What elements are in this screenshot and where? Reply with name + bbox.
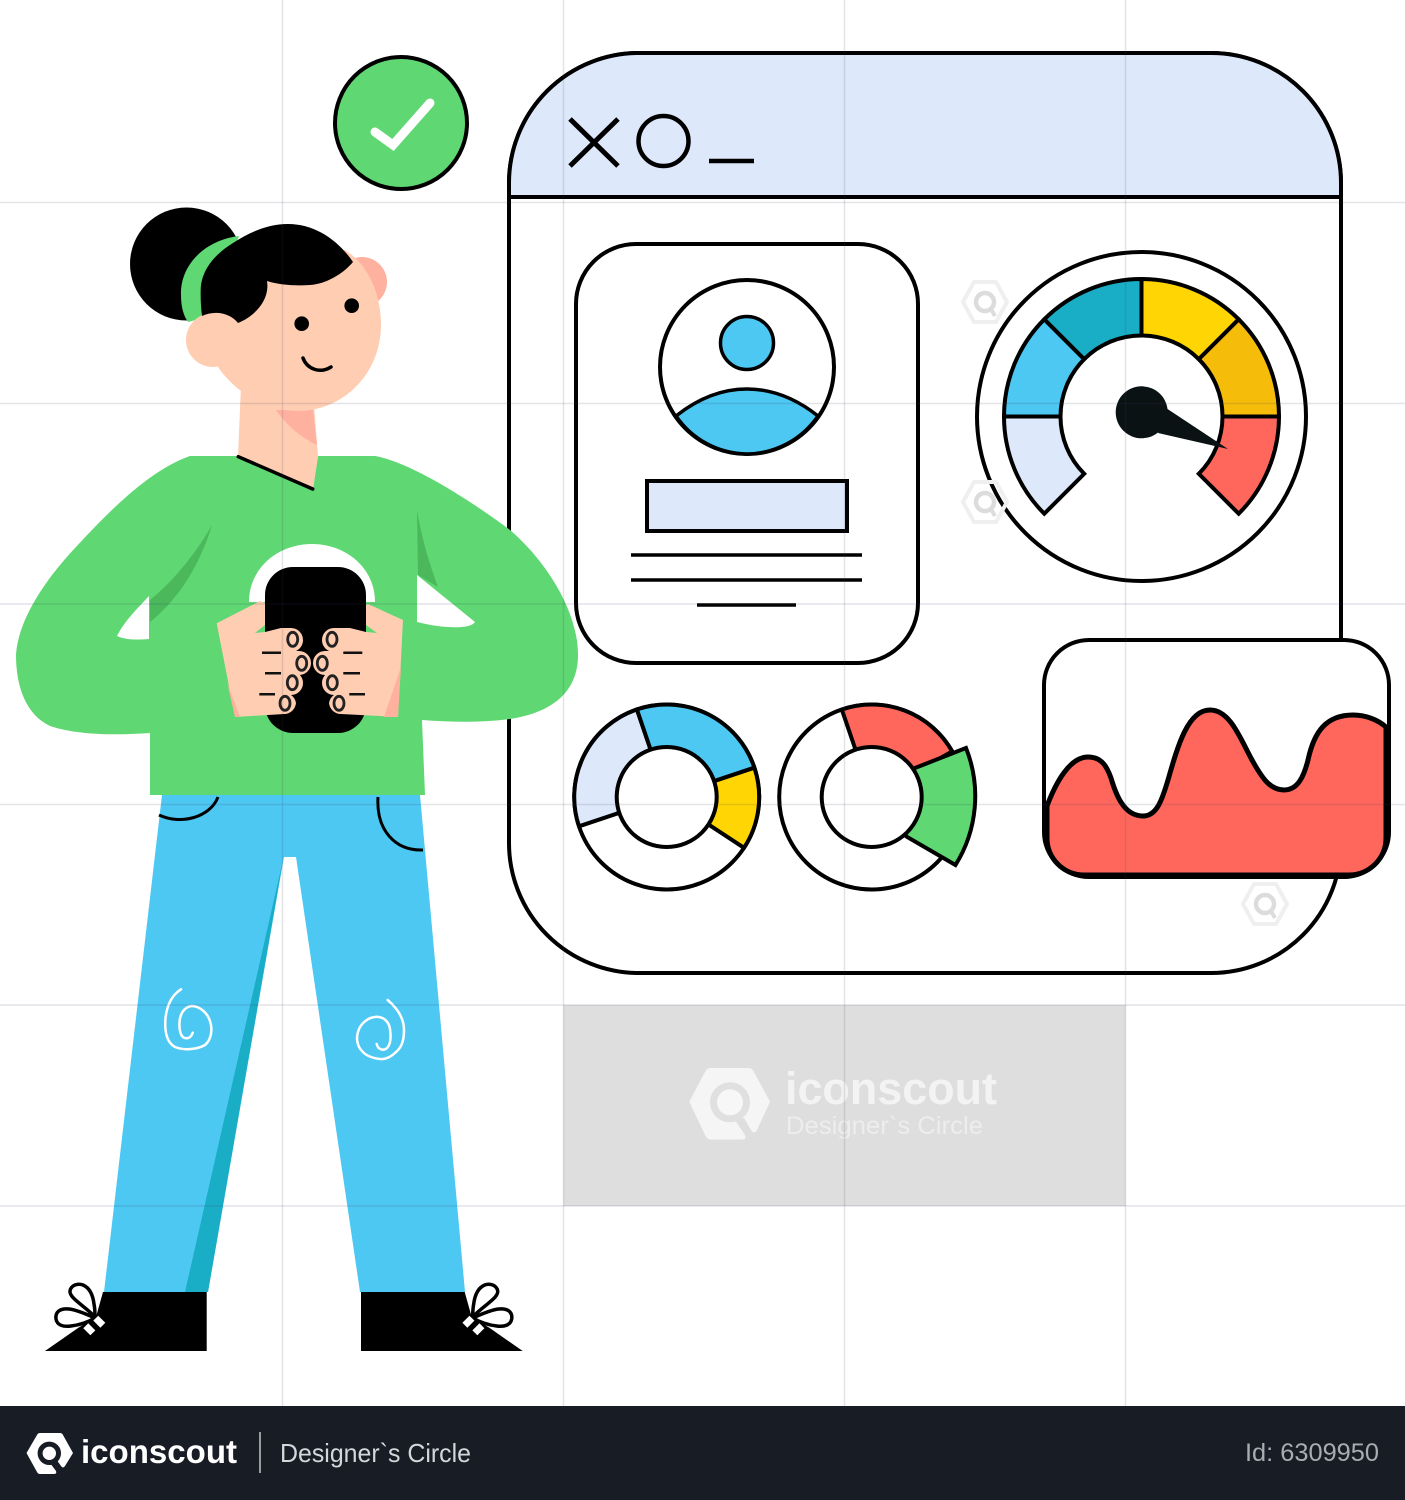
watermark logo — [689, 1068, 770, 1140]
footer author text: Designer`s Circle — [280, 1438, 471, 1468]
icon: watermark badge three — [1243, 884, 1287, 924]
icon: minimize — [709, 159, 754, 163]
watermark author text: Designer`s Circle — [786, 1112, 983, 1140]
right shoe — [361, 1284, 523, 1351]
panel: profile card — [576, 244, 918, 663]
phone — [265, 567, 366, 733]
icon: watermark badge two — [963, 482, 1007, 522]
sweater — [16, 456, 578, 795]
watermark block — [564, 1005, 1126, 1206]
chart: donut two — [779, 704, 975, 890]
icon: close — [570, 119, 618, 166]
footer bar — [0, 1406, 1405, 1500]
hair — [201, 224, 353, 323]
face — [186, 250, 381, 411]
trousers — [104, 795, 465, 1292]
chart: gauge — [977, 252, 1306, 581]
avatar — [660, 280, 834, 454]
icon: watermark badge one — [963, 282, 1007, 322]
panel: dashboard window — [509, 53, 1389, 973]
eyes — [294, 298, 359, 331]
name field — [647, 481, 847, 531]
bun and hair band — [130, 208, 243, 322]
window title bar — [509, 53, 1341, 197]
icon: green check badge — [335, 57, 467, 189]
chart: donut one — [574, 704, 759, 890]
smile — [303, 358, 331, 370]
chart: area chart card — [1044, 640, 1389, 877]
neck — [238, 385, 318, 489]
footer brand text: iconscout — [81, 1433, 237, 1470]
text lines — [631, 555, 862, 605]
left shoe — [45, 1284, 207, 1351]
collar line — [238, 457, 313, 489]
footer logo — [26, 1433, 73, 1474]
footer divider — [259, 1432, 261, 1473]
footer id text: Id: 6309950 — [1245, 1439, 1379, 1467]
watermark brand text: iconscout — [785, 1063, 997, 1114]
gauge needle — [1116, 386, 1228, 449]
hands — [217, 601, 403, 717]
figure: woman — [16, 208, 578, 1351]
icon: maximize — [638, 116, 688, 166]
far ear — [337, 257, 387, 307]
